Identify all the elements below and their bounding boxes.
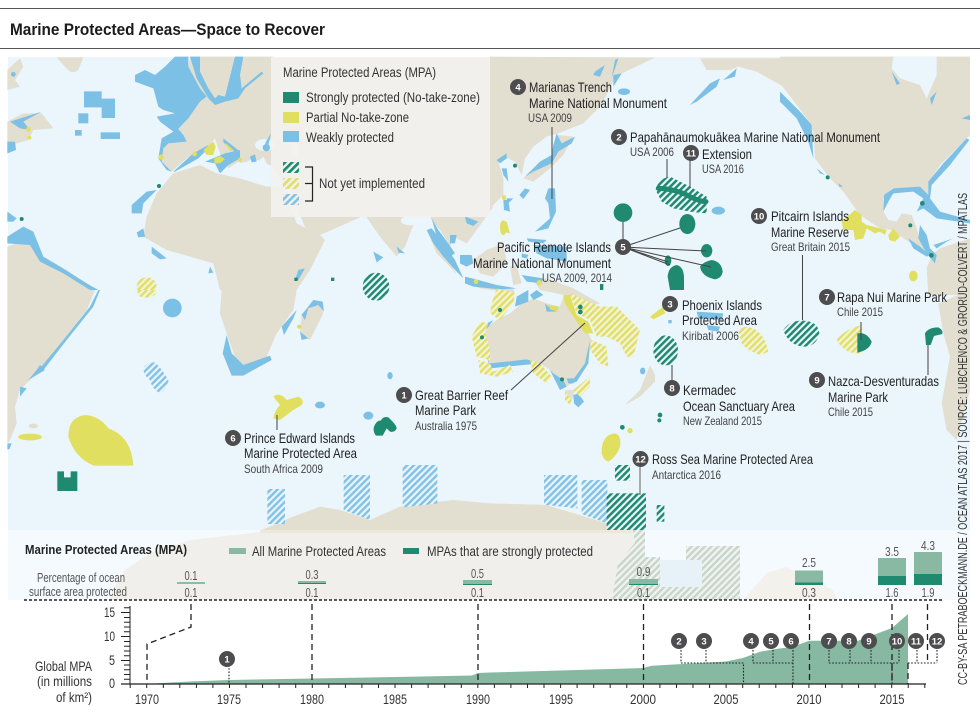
legend: partial no-take: Partial No-take-zone: [306, 110, 409, 125]
marker 1: [219, 651, 235, 667]
bar 2000: 0.1: [637, 585, 650, 600]
bar 2010: 2.5: [802, 555, 816, 570]
label 5: Pacific Remote Islands: Marine National Monument: [473, 255, 611, 271]
label 5: Pacific Remote Islands: USA 2009, 2014: [542, 271, 612, 285]
x axis: 2010: [796, 691, 822, 707]
bar 1990: [463, 566, 492, 600]
marker 3: [696, 633, 712, 649]
label 7: Rapa Nui: Chile 2015: [837, 305, 883, 319]
label 4: Marianas Trench: Marine National Monument: [529, 95, 667, 111]
chart legend: All Marine Protected Areas: [252, 544, 386, 559]
percentage row label: surface area protected: [29, 585, 127, 599]
label 12: Ross Sea: [632, 451, 813, 495]
chart backdrop: [8, 530, 970, 600]
bar 2017: 4.3: [921, 538, 935, 553]
land: North and Central America: [780, 57, 970, 295]
label 9: Nazca-Desventuradas: [809, 345, 939, 419]
label 8: Kermadec: 8: [669, 384, 675, 394]
marker 9: 9: [866, 636, 872, 648]
x axis: 2005: [714, 691, 739, 707]
legend: weakly protected: Weakly protected: [306, 130, 394, 145]
label 10: Pitcairn Islands: Marine Reserve: [771, 224, 849, 240]
y axis title: (in millions: [37, 673, 92, 689]
bar 1980: 0.3: [306, 567, 318, 582]
label 9: Nazca-Desventuradas: 9: [814, 376, 820, 386]
chart heading: Marine Protected Areas (MPA): [25, 542, 187, 557]
label 8: Kermadec: Kermadec: [683, 382, 736, 398]
partial: Great Barrier Reef: [474, 222, 593, 333]
hatched: Australian waters: [472, 288, 640, 405]
y axis title: Global MPA: [35, 658, 93, 674]
label 5: Pacific Remote Islands: Pacific Remote Islands: [497, 239, 611, 255]
weak: North America: [780, 72, 970, 263]
bar 2000: 0.9: [636, 564, 650, 579]
marker 7: 7: [826, 636, 832, 648]
bar 1980: [298, 567, 326, 600]
marker 1: 1: [224, 654, 230, 666]
marker 3: 3: [701, 636, 707, 648]
label 4: Marianas Trench: USA 2009: [528, 111, 572, 125]
label 5: Pacific Remote Islands: [473, 222, 711, 285]
y axis title: [35, 658, 93, 705]
weak: Southeast Asia and Australia: [427, 200, 590, 407]
top rule: [0, 8, 980, 9]
label 10: Pitcairn Islands: Great Britain 2015: [771, 240, 850, 254]
label 8: Kermadec: New Zealand 2015: [683, 414, 762, 428]
weak: East Asia: [497, 58, 630, 232]
bar 2015: 3.5: [885, 544, 899, 559]
legend heading: Marine Protected Areas (MPA): [283, 65, 436, 80]
label 11: Extension: [683, 145, 752, 188]
y axis: [104, 604, 130, 691]
marker 12: [929, 633, 945, 649]
label 1: Great Barrier Reef: Great Barrier Reef: [415, 387, 508, 403]
x axis: 2015: [880, 691, 905, 707]
bar 2010: [795, 555, 823, 600]
weakly protected areas: [7, 57, 970, 449]
title rule: [0, 48, 980, 49]
partial no-take areas: [18, 127, 918, 466]
bar 1973: 0.1: [184, 568, 198, 583]
label 3: Phoenix Islands: Phoenix Islands: [682, 297, 762, 313]
legend panel: [271, 57, 490, 217]
x axis: 1985: [383, 691, 407, 707]
marker 8: 8: [846, 636, 852, 648]
label 2: Papahānaumokuākea: Papahānaumokuākea Marine National Monument: [630, 129, 880, 145]
bar 2015: [878, 544, 906, 600]
label 6: Prince Edward Islands: Marine Protected Area: [244, 445, 357, 461]
marker 2: [671, 633, 687, 649]
bar 2017: [914, 538, 942, 600]
partial: Mexico: [842, 210, 918, 281]
label 7: Rapa Nui: [819, 289, 948, 340]
label 1: Great Barrier Reef: Australia 1975: [415, 419, 477, 433]
title: Marine Protected Areas—Space to Recover: [10, 20, 325, 39]
chart legend: [229, 544, 593, 559]
x axis: 1990: [466, 691, 490, 707]
label 3: Phoenix Islands: 3: [667, 300, 673, 310]
label 6: Prince Edward Islands: 6: [230, 434, 236, 444]
label 8: Kermadec: [664, 365, 795, 428]
x axis: [121, 684, 926, 707]
percentage row label: Percentage of ocean: [37, 571, 125, 585]
x axis: 1980: [300, 691, 324, 707]
y axis: 0: [109, 675, 115, 691]
marker 10: 10: [892, 636, 902, 648]
y axis title: of km²): [56, 689, 92, 705]
label 10: Pitcairn Islands: Pitcairn Islands: [771, 208, 849, 224]
label 6: Prince Edward Islands: [225, 415, 357, 476]
marker 5: [763, 633, 779, 649]
x axis: 1995: [549, 691, 573, 707]
percentage row label: [29, 571, 127, 599]
label 7: Rapa Nui: 7: [824, 292, 830, 304]
label 10: Pitcairn Islands: 10: [754, 212, 764, 222]
x axis: 1970: [135, 691, 159, 707]
marker 4: [743, 633, 759, 649]
land: Southeast Asia and Australia: [428, 207, 600, 400]
x axis: 2000: [630, 691, 656, 707]
label 4: Marianas Trench: [510, 79, 667, 199]
label 6: Prince Edward Islands: South Africa 2009: [244, 462, 323, 476]
bar 1980: 0.1: [306, 585, 318, 600]
inland seas: [227, 57, 937, 225]
legend: weakly protected: [283, 130, 394, 145]
partial: Mediterranean: [158, 142, 242, 163]
bar 1973: [177, 568, 205, 600]
y axis: 15: [104, 604, 115, 620]
label 4: Marianas Trench: 4: [515, 82, 521, 94]
dotted separator: [24, 599, 943, 601]
label 3: Phoenix Islands: Protected Area: [682, 312, 757, 328]
chart legend: MPAs that are strongly protected: [427, 544, 593, 559]
label 5: Pacific Remote Islands: 5: [620, 242, 626, 254]
marker 4: 4: [748, 636, 754, 648]
label 7: Rapa Nui: Rapa Nui Marine Park: [837, 289, 948, 305]
label 1: Great Barrier Reef: Marine Park: [415, 402, 477, 418]
label 2: Papahānaumokuākea: [611, 129, 880, 178]
x axis: 1975: [217, 691, 241, 707]
partial: Philippines: [500, 195, 507, 235]
label 6: Prince Edward Islands: Prince Edward Islands: [244, 430, 355, 446]
bar 2010: 0.3: [802, 585, 816, 600]
label 2: Papahānaumokuākea: 2: [616, 132, 622, 144]
dashed year connectors: [147, 604, 928, 684]
label 12: Ross Sea: Ross Sea Marine Protected Area: [652, 451, 813, 467]
marker 10: [889, 633, 905, 649]
label 4: Marianas Trench: Marianas Trench: [529, 79, 612, 95]
label 12: Ross Sea: 12: [635, 454, 646, 466]
label 3: Phoenix Islands: [662, 296, 762, 343]
timeline event markers: [219, 633, 945, 684]
label 1: Great Barrier Reef: 1: [401, 390, 407, 402]
label 10: Pitcairn Islands: [751, 208, 850, 320]
percentage bars: [177, 538, 942, 600]
bar 1990: 0.1: [471, 585, 484, 600]
marker 2: 2: [676, 636, 682, 648]
label 1: Great Barrier Reef: [396, 323, 585, 433]
land: Europe: [162, 57, 273, 172]
label 9: Nazca-Desventuradas: Nazca-Desventuradas: [828, 373, 939, 389]
label 11: Extension: 11: [686, 148, 697, 160]
label 2: Papahānaumokuākea: USA 2006: [630, 145, 674, 159]
land masses: [7, 57, 970, 530]
marker 8: [841, 633, 857, 649]
y axis: 5: [109, 652, 115, 668]
marker 5: 5: [768, 636, 774, 648]
marker 7: [821, 633, 837, 649]
label 9: Nazca-Desventuradas: Marine Park: [828, 389, 889, 405]
label 11: Extension: Extension: [702, 146, 752, 162]
label 3: Phoenix Islands: Kiribati 2006: [682, 329, 739, 343]
marker 12: 12: [932, 636, 942, 648]
bar 1990: 0.5: [471, 566, 484, 581]
legend: strongly protected: Strongly protected (No-take-zone): [306, 90, 480, 105]
label 12: Ross Sea: Antarctica 2016: [652, 468, 721, 482]
label 11: Extension: USA 2016: [702, 162, 744, 176]
land: East Asia: [490, 57, 655, 208]
bar 2015: 1.6: [886, 585, 898, 600]
y axis: 10: [104, 628, 115, 644]
legend: not yet implemented: Not yet implemented: [319, 176, 425, 191]
legend: not yet implemented: [283, 162, 425, 205]
marker lines: [229, 650, 937, 684]
label 8: Kermadec: Ocean Sanctuary Area: [683, 398, 795, 414]
area chart: global MPA: [147, 614, 908, 684]
marker 11: 11: [911, 636, 922, 648]
bar 2017: 1.9: [922, 585, 934, 600]
marker 9: [861, 633, 877, 649]
bar 2000: [629, 564, 658, 600]
bar 1973: 0.1: [184, 585, 198, 600]
world map: [7, 57, 970, 530]
weak: European shelf: [135, 57, 271, 173]
strongly protected areas: [20, 164, 942, 491]
marker 6: 6: [788, 636, 794, 648]
marker 11: [908, 633, 924, 649]
hatched not-yet-implemented areas: [137, 177, 862, 530]
marker 6: [783, 633, 799, 649]
label 9: Nazca-Desventuradas: Chile 2015: [828, 405, 873, 419]
